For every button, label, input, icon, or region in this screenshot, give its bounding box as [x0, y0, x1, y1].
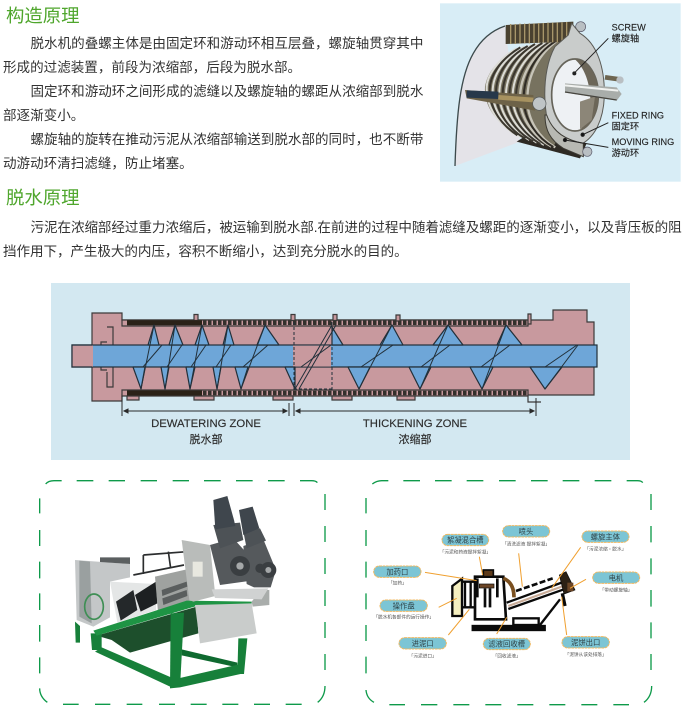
- text block: structure principle: 部逐渐变小。: [3, 108, 84, 123]
- machine schematic: [452, 570, 575, 631]
- callout titles: 加药口: [386, 567, 408, 576]
- ring labels: FIXED RING: [612, 110, 664, 120]
- ring labels: SCREW: [612, 23, 646, 33]
- heading: structure principle: 构造原理: [6, 5, 80, 26]
- callout descriptions: 「脱水机各部件的运行操作」: [373, 613, 434, 620]
- callout titles: 泥饼出口: [571, 638, 600, 647]
- callout descriptions: 「清洗滤液 搅拌絮凝」: [502, 541, 550, 548]
- back plate: [455, 26, 587, 166]
- callout descriptions: 「污泥进口」: [409, 652, 437, 659]
- ring labels: [612, 23, 674, 158]
- casing: [92, 310, 594, 402]
- front ring: [545, 23, 604, 147]
- screw shaft: [565, 76, 624, 101]
- callout descriptions: 「回收滤液」: [493, 653, 521, 660]
- machine: green frame: [75, 601, 252, 688]
- text block: structure principle: 固定环和游动环之间形成的滤缝以及螺旋轴的螺距从浓缩部到脱水: [30, 84, 423, 99]
- machine: stainless plates: [182, 540, 269, 643]
- callout titles: 喷头: [519, 527, 533, 536]
- panel: screw cross-section diagram: [51, 283, 630, 460]
- machine: gearboxes and motors: [210, 496, 276, 587]
- ring labels: 螺旋轴: [612, 33, 639, 44]
- panel: machine photo frame: [39, 480, 326, 705]
- zone labels: 浓缩部: [398, 432, 432, 446]
- text block: dewatering principle: 挡作用下，产生极大的内压，容积不断缩小，达到充分脱水的目的。: [3, 244, 408, 259]
- callout titles: 电机: [609, 573, 624, 582]
- zone labels: THICKENING ZONE: [363, 418, 468, 430]
- text block: dewatering principle: [3, 220, 682, 259]
- text block: structure principle: [3, 36, 423, 171]
- machine: tank and covers: [75, 557, 191, 627]
- ring labels: 游动环: [612, 147, 639, 158]
- filter ring strips: [127, 323, 528, 393]
- screw flights: [133, 325, 562, 389]
- text block: structure principle: 螺旋轴的旋转在推动污泥从浓缩部输送到脱水部的同时，也不断带: [30, 132, 423, 147]
- callout titles: 进泥口: [412, 639, 434, 648]
- text block: structure principle: 形成的过滤装置，前段为浓缩部，后段为脱水部。: [3, 60, 301, 75]
- callout pills: [374, 526, 640, 650]
- callout titles: [386, 527, 624, 649]
- callout descriptions: [373, 541, 632, 660]
- dimension lines: [122, 396, 536, 416]
- screw shaft: [72, 345, 597, 367]
- blade lines: [141, 322, 578, 390]
- callout descriptions: 「污泥浓缩・脱水」: [584, 545, 626, 552]
- text block: structure principle: 动游动环清扫滤缝，防止堵塞。: [3, 156, 193, 171]
- panel: labelled machine diagram: [365, 480, 652, 706]
- text block: structure principle: 脱水机的叠螺主体是由固定环和游动环相互层叠，螺旋轴贯穿其中: [30, 36, 423, 51]
- leader lines: [563, 38, 608, 147]
- top rod: [506, 22, 586, 44]
- panel: ring assembly photo: [440, 3, 681, 182]
- heading: dewatering principle: 脱水原理: [6, 187, 80, 208]
- callout descriptions: 「加药」: [388, 580, 407, 587]
- callout descriptions: 「带动螺旋轴」: [600, 587, 632, 594]
- ring labels: MOVING RING: [612, 137, 674, 147]
- callout titles: 絮凝混合槽: [447, 536, 484, 545]
- zone labels: 脱水部: [190, 432, 222, 446]
- callout titles: 操作盘: [393, 601, 415, 610]
- callout descriptions: 「污泥和药液搅拌絮凝」: [440, 549, 491, 556]
- callout arrows: [425, 547, 586, 635]
- ring stack: [485, 41, 580, 147]
- callout titles: 螺旋主体: [591, 532, 621, 541]
- zone labels: DEWATERING ZONE: [151, 418, 261, 430]
- callout descriptions: 「泥饼从该处排落」: [565, 651, 607, 658]
- text block: dewatering principle: 污泥在浓缩部经过重力浓缩后，被运输到脱水部.在前进的过程中随着滤缝及螺距的逐渐变小，以及背压板的阻: [30, 220, 682, 235]
- callout titles: 滤液回收槽: [488, 640, 526, 649]
- bottom ring edge and bolt: [545, 115, 592, 157]
- ring labels: 固定环: [612, 120, 639, 131]
- middle rod: [465, 90, 546, 111]
- machine: railing: [133, 552, 187, 575]
- zone labels: [151, 418, 468, 446]
